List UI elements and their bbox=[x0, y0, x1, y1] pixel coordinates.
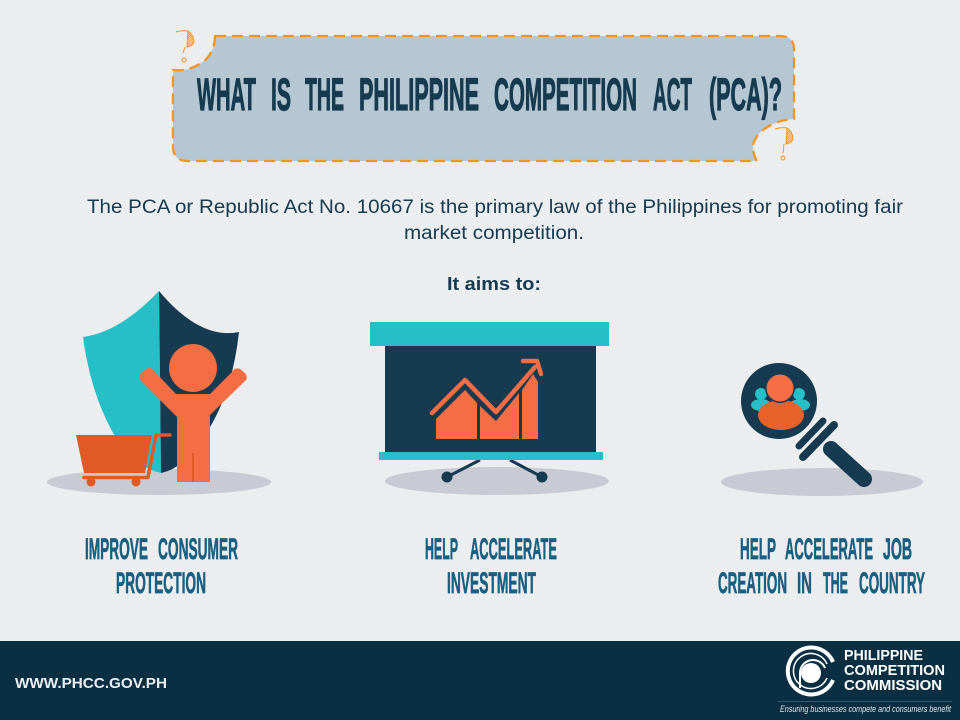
logo wordmark: PHILIPPINE bbox=[844, 648, 923, 664]
icon: shield, person and cart bbox=[47, 291, 271, 495]
logo wordmark: COMMISSION bbox=[844, 678, 942, 694]
label: help accelerate job creation bbox=[718, 533, 925, 600]
title: THE bbox=[305, 69, 344, 120]
title bbox=[197, 69, 782, 120]
label: help accelerate job creation: IN bbox=[797, 567, 812, 600]
title banner bbox=[173, 31, 794, 161]
title: ACT bbox=[653, 69, 692, 120]
icon: question mark bottom right bbox=[775, 128, 793, 160]
title: COMPETITION bbox=[494, 69, 637, 120]
website url: WWW.PHCC.GOV.PH bbox=[15, 675, 167, 692]
label: help accelerate job creation: JOB bbox=[883, 533, 912, 566]
footer band bbox=[0, 641, 960, 720]
label: help accelerate job creation: HELP bbox=[740, 533, 776, 566]
intro text: The PCA or Republic Act No. 10667 is the primary law of the Philippines for promoting fair bbox=[87, 197, 904, 218]
title: WHAT bbox=[197, 69, 256, 120]
logo mark bbox=[788, 647, 833, 694]
logo wordmark: COMPETITION bbox=[844, 663, 945, 679]
intro text bbox=[87, 197, 904, 244]
label: help accelerate investment: HELP bbox=[425, 533, 458, 566]
icon: question mark top left bbox=[176, 31, 194, 62]
title banner: (PCA)? bbox=[709, 69, 782, 120]
icon: magnifying glass over people bbox=[721, 363, 923, 496]
title: PHILIPPINE bbox=[359, 69, 479, 120]
title: IS bbox=[271, 69, 291, 120]
label: help accelerate investment bbox=[425, 533, 557, 600]
label: help accelerate job creation: THE bbox=[823, 567, 848, 600]
label: improve consumer protection: PROTECTION bbox=[116, 567, 206, 600]
text: CONSUMER bbox=[158, 533, 238, 566]
label: improve consumer protection bbox=[85, 533, 238, 600]
text: ACCELERATE bbox=[470, 533, 557, 566]
icon: presentation board with rising chart bbox=[370, 322, 609, 495]
subheading: It aims to: bbox=[447, 273, 541, 294]
logo wordmark bbox=[844, 648, 945, 694]
label: improve consumer protection: IMPROVE bbox=[85, 533, 148, 566]
intro text: market competition. bbox=[404, 223, 584, 244]
label: help accelerate investment: INVESTMENT bbox=[447, 567, 536, 600]
label: help accelerate job creation: CREATION bbox=[718, 567, 787, 600]
